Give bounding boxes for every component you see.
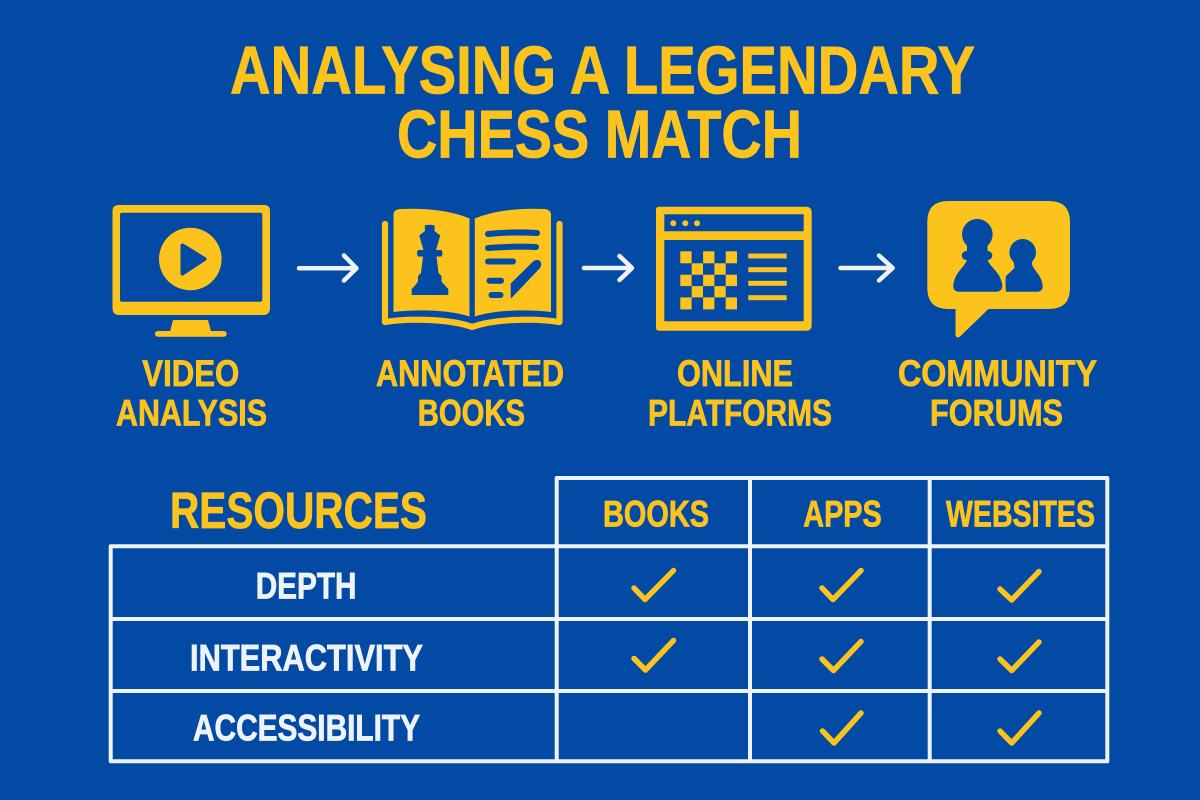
label: community forums: FORUMS: [930, 392, 1063, 433]
label: online platforms: PLATFORMS: [648, 392, 832, 433]
label: online platforms: ONLINE: [677, 353, 793, 394]
title: [230, 32, 975, 172]
label: annotated books: BOOKS: [418, 392, 525, 433]
small pawn: [1006, 239, 1043, 292]
label: video analysis: ANALYSIS: [116, 392, 267, 433]
table heading: resources: RESOURCES: [170, 482, 427, 539]
window dots: [670, 220, 700, 226]
chessboard: [680, 251, 737, 309]
label: community forums: COMMUNITY: [898, 353, 1097, 394]
row labels: INTERACTIVITY: [190, 638, 423, 679]
table grid: [111, 478, 1107, 761]
icon: browser window with chessboard: [656, 207, 812, 331]
large pawn: [953, 219, 1002, 292]
label: video analysis: [116, 353, 267, 433]
arrow: books to platforms: [584, 256, 632, 280]
book text lines and pencil: [488, 232, 537, 295]
row labels: ACCESSIBILITY: [193, 708, 420, 749]
notation lines: [748, 254, 787, 300]
column headers: BOOKS: [603, 494, 709, 535]
title: ANALYSING A LEGENDARY: [230, 32, 975, 108]
label: video analysis: VIDEO: [142, 353, 239, 394]
title: CHESS MATCH: [397, 96, 802, 172]
arrow: video to books: [299, 256, 356, 280]
icon: speech bubble with two pawns: [927, 201, 1070, 337]
icon: annotated book with chess king: [385, 209, 560, 327]
chess king silhouette: [412, 225, 448, 295]
row labels: DEPTH: [256, 566, 356, 607]
column headers: APPS: [803, 494, 882, 535]
column headers: [603, 494, 1095, 535]
comparison table: [111, 478, 1107, 761]
label: community forums: [898, 353, 1097, 433]
label: annotated books: ANNOTATED: [376, 353, 564, 394]
icon: video monitor with play button: [112, 205, 270, 337]
label: annotated books: [376, 353, 564, 433]
label: online platforms: [648, 353, 832, 433]
column headers: WEBSITES: [946, 494, 1095, 535]
arrow: platforms to forums: [840, 256, 893, 280]
check marks: [634, 570, 1039, 743]
row labels: [190, 566, 423, 749]
